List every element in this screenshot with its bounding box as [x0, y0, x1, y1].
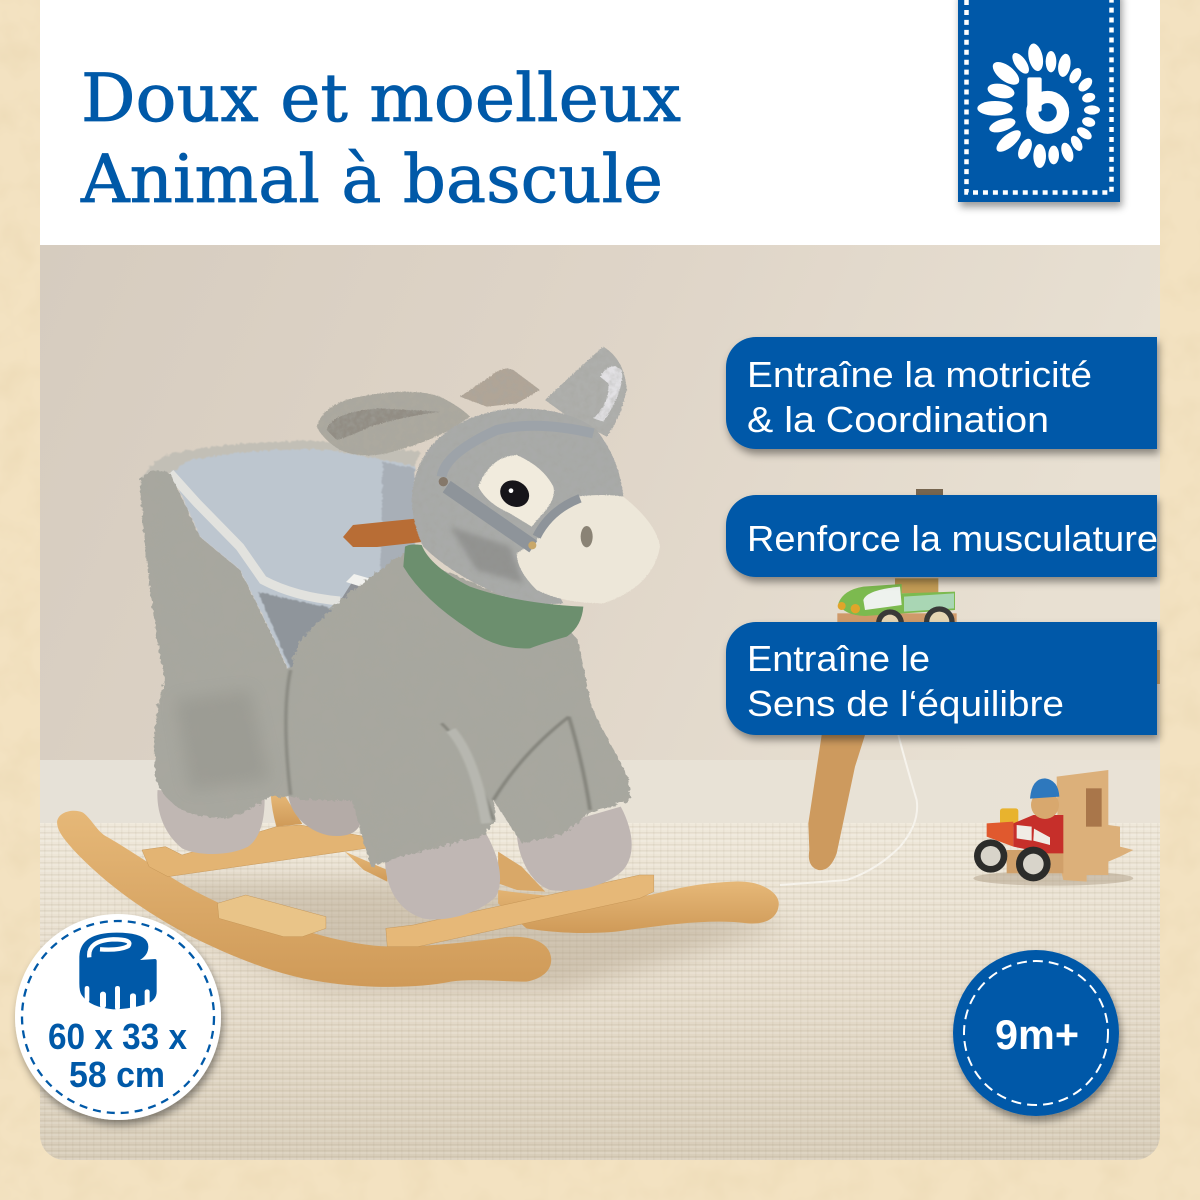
left ear [317, 392, 470, 455]
front rocker [57, 811, 551, 987]
skirting board [40, 760, 1160, 825]
forelock [460, 368, 540, 407]
muzzle [517, 495, 660, 603]
icon: measuring tape [79, 933, 157, 1010]
cheek shading [450, 527, 523, 583]
center post [498, 852, 545, 892]
feature label: balance: Entraîne le [747, 638, 930, 679]
seat lower shadow [258, 592, 334, 668]
stool leg [808, 735, 865, 870]
rear fur shading [182, 696, 262, 784]
dimensions text: 60 x 33 x [48, 1016, 187, 1057]
front crossbar [386, 875, 654, 947]
carpet [40, 823, 1160, 1160]
donkey plush [140, 347, 660, 867]
wall [40, 245, 1160, 765]
feature label: muscles [726, 495, 1158, 577]
nostril [581, 526, 593, 547]
fur silhouette [140, 471, 630, 867]
title: Doux et moelleux [81, 60, 681, 137]
seat interior [170, 449, 415, 680]
head group [317, 347, 660, 648]
head fur [412, 408, 623, 604]
dimensions badge [15, 914, 221, 1120]
right ear [545, 347, 627, 437]
eye [495, 475, 534, 512]
feature label: balance: Sens de l‘équilibre [747, 683, 1064, 724]
front hooves [517, 807, 632, 891]
upper body [282, 553, 610, 800]
seat strap [170, 473, 340, 601]
seat rim [140, 441, 420, 485]
photo: rocking donkey scene [40, 245, 1160, 1160]
handle [343, 518, 422, 547]
white cord [780, 735, 917, 885]
back rocker [271, 793, 779, 933]
toy tractor on stool [837, 578, 957, 622]
dimensions text [48, 1016, 187, 1095]
dimensions text: 58 cm [69, 1054, 165, 1095]
seat block [217, 895, 326, 937]
rear crossbar [142, 825, 366, 877]
header panel [40, 0, 1160, 245]
logo tag [958, 0, 1120, 202]
leg creases [286, 670, 590, 823]
age badge [953, 950, 1119, 1116]
seat inner side [380, 462, 415, 580]
eye patch [478, 455, 554, 527]
title [80, 60, 681, 218]
feature label: motor skills: & la Coordination [747, 399, 1049, 440]
wall peg at right edge [1157, 650, 1160, 684]
stool top [916, 489, 943, 495]
green scarf [403, 544, 583, 648]
feature label: muscles: Renforce la musculature [747, 518, 1158, 559]
floor shadow [120, 880, 790, 990]
seat wing [139, 470, 287, 800]
feature label: motor skills [726, 337, 1157, 449]
rocker base and hooves [57, 790, 779, 987]
buckle [342, 584, 358, 599]
title: Animal à bascule [80, 141, 663, 218]
rear hooves [288, 795, 360, 836]
feature label: motor skills: Entraîne la motricité [747, 354, 1092, 395]
halter straps [442, 426, 593, 477]
lower body and legs [156, 670, 630, 867]
feature label: balance [726, 622, 1157, 735]
toy forklift [973, 770, 1133, 886]
background toys [780, 578, 1133, 886]
age badge: 9m+ [995, 1011, 1079, 1058]
